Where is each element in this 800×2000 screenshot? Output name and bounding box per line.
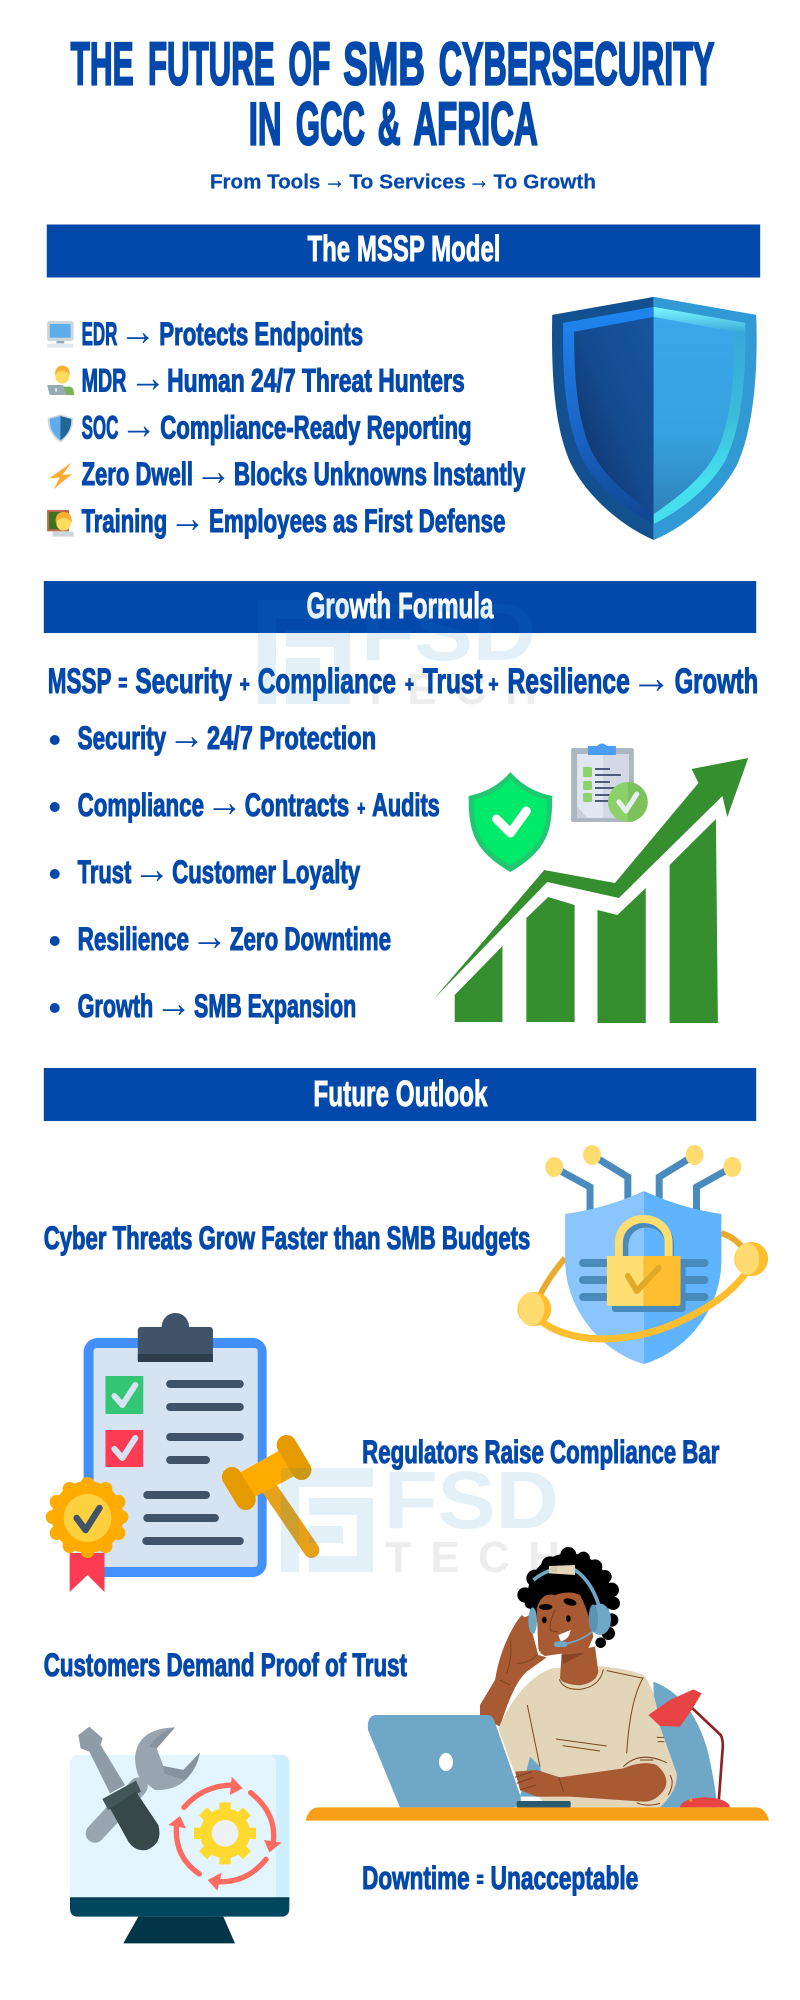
title: AFRICA [413, 90, 538, 158]
monitor base [70, 1897, 289, 1917]
panel: growth bullet list [50, 711, 440, 1026]
title: SMB [343, 31, 425, 98]
formula: Trust [423, 662, 483, 701]
gear [181, 1789, 269, 1877]
subtitle: → [324, 166, 346, 195]
headset [533, 1567, 599, 1607]
bullet: Trust: → [133, 845, 170, 892]
text: downtime: = [477, 1867, 484, 1892]
banner: Growth Formula: Growth Formula [306, 585, 494, 626]
bullet: Security: 24/7 Protection [207, 720, 376, 756]
bullet: Compliance: Compliance [78, 787, 204, 823]
lamp [691, 1707, 723, 1807]
formula: = [118, 670, 127, 697]
list item: SOC: → [120, 400, 157, 448]
formula: Resilience [507, 662, 630, 701]
subtitle: → [468, 166, 490, 195]
bullet: Resilience: → [191, 912, 228, 959]
subtitle: To Growth [494, 171, 596, 194]
list item: SOC: Compliance-Ready Reporting [160, 409, 472, 446]
watermark: FSD TECH upper [258, 587, 537, 714]
bullet: Growth: SMB Expansion [194, 988, 356, 1024]
list item: EDR: → [119, 307, 156, 354]
list item: Training [82, 494, 505, 541]
hair [517, 1547, 620, 1648]
formula: Growth [675, 662, 758, 701]
forearm [515, 1763, 666, 1802]
text: customers: Customers Demand Proof of Trust [44, 1647, 407, 1683]
list item: Training: → [169, 494, 206, 541]
screwdriver [78, 1727, 125, 1793]
list item: EDR: EDR [82, 316, 117, 352]
illustration: woman with headset at laptop [306, 1547, 769, 1821]
bullet: Compliance: Audits [372, 787, 440, 823]
illustration: monitor with tools and gear [70, 1727, 289, 1943]
panel: MSSP model list [47, 307, 526, 541]
watermark: FSD TECH upper: TECH [362, 665, 537, 714]
text: downtime: Unacceptable [491, 1860, 638, 1896]
subtitle [210, 166, 596, 195]
banner: The MSSP Model: The MSSP Model [307, 228, 500, 269]
list item: Zero Dwell: Zero Dwell [82, 456, 193, 492]
icon: lock shield with circuits [517, 1145, 768, 1364]
bullet: Compliance: → [206, 778, 243, 825]
bullet: Compliance: Contracts [245, 787, 349, 823]
banner: Future Outlook: Future Outlook [313, 1073, 488, 1114]
laptop [368, 1715, 521, 1807]
bullet: Security [50, 711, 376, 758]
bullet: Resilience [50, 912, 391, 959]
formula: + [489, 672, 498, 697]
list item: Zero Dwell: → [195, 447, 232, 494]
chart: green growth bars and arrow [434, 758, 748, 1023]
icon: technologist [47, 366, 74, 395]
bullet: Compliance [50, 778, 440, 825]
watermark: FSD TECH lower: FSD [384, 1455, 559, 1546]
text: cyber threats: Cyber Threats Grow Faster than SMB Budgets [44, 1220, 530, 1256]
bullet: Security: → [168, 711, 205, 758]
icon: teacher [47, 510, 74, 537]
title: GCC [296, 90, 365, 158]
watermark: FSD TECH lower [281, 1455, 560, 1582]
bullet: Trust: Customer Loyalty [172, 854, 360, 890]
formula [48, 651, 758, 703]
subtitle: From Tools [210, 171, 320, 194]
watermark: FSD TECH lower: TECH [385, 1533, 560, 1582]
icon: compliance clipboard with gavel and badge [46, 1313, 311, 1592]
banner: Growth Formula [44, 581, 756, 633]
bullet: Growth [50, 979, 356, 1026]
neck [560, 1647, 598, 1685]
title: OF [289, 31, 330, 98]
list item: Zero Dwell [82, 447, 526, 494]
bullet: Growth: → [155, 979, 192, 1026]
icon: compliance clipboard [571, 744, 648, 822]
list item: MDR: → [129, 353, 166, 401]
icon: desktop computer [47, 321, 74, 348]
formula: + [240, 672, 250, 697]
formula: Security [135, 662, 232, 701]
watermark: FSD TECH upper: FSD [361, 587, 536, 678]
formula: + [405, 672, 414, 697]
bullet: Trust: Trust [78, 854, 132, 890]
formula: MSSP [48, 662, 111, 701]
list item: MDR: Human 24/7 Threat Hunters [167, 362, 465, 399]
bullet: Trust [50, 845, 360, 892]
list item: SOC: SOC [82, 409, 118, 446]
list item: SOC [82, 400, 472, 448]
title: & [378, 90, 401, 158]
wrench [95, 1787, 138, 1833]
bullet: Compliance: + [357, 798, 365, 820]
text: downtime [362, 1860, 638, 1896]
list item: Training: Training [82, 503, 167, 539]
text: downtime: Downtime [362, 1860, 470, 1896]
sweater [498, 1666, 677, 1807]
list item: MDR: MDR [82, 362, 126, 399]
list item: EDR [82, 307, 363, 354]
icon: shield emoji [48, 414, 73, 442]
list item: Training: Employees as First Defense [209, 503, 505, 539]
bullet: Security: Security [78, 720, 166, 756]
formula: → [631, 651, 672, 703]
list item: EDR: Protects Endpoints [159, 316, 363, 352]
title [71, 31, 714, 158]
list item: MDR [82, 353, 465, 401]
cycle arrows [176, 1785, 274, 1882]
banner: Future Outlook [44, 1068, 756, 1121]
title: THE [71, 31, 134, 98]
icon: lightning bolt [49, 463, 72, 489]
bullet: Resilience: Resilience [78, 921, 189, 957]
monitor stand [123, 1917, 235, 1943]
title: FUTURE [148, 31, 275, 98]
icon: green check shield [469, 772, 552, 872]
chair [653, 1682, 717, 1807]
arm raised to head [480, 1615, 547, 1727]
formula: Compliance [258, 662, 396, 701]
bullet: Growth: Growth [78, 988, 153, 1024]
banner: The MSSP Model [47, 224, 760, 278]
title: IN [249, 90, 282, 158]
icon: large blue shield [552, 297, 757, 540]
desk [306, 1807, 769, 1821]
face [537, 1592, 593, 1656]
bullet: Resilience: Zero Downtime [230, 921, 391, 957]
monitor screen [70, 1755, 289, 1902]
list item: Zero Dwell: Blocks Unknowns Instantly [234, 456, 526, 492]
subtitle: To Services [349, 171, 466, 194]
